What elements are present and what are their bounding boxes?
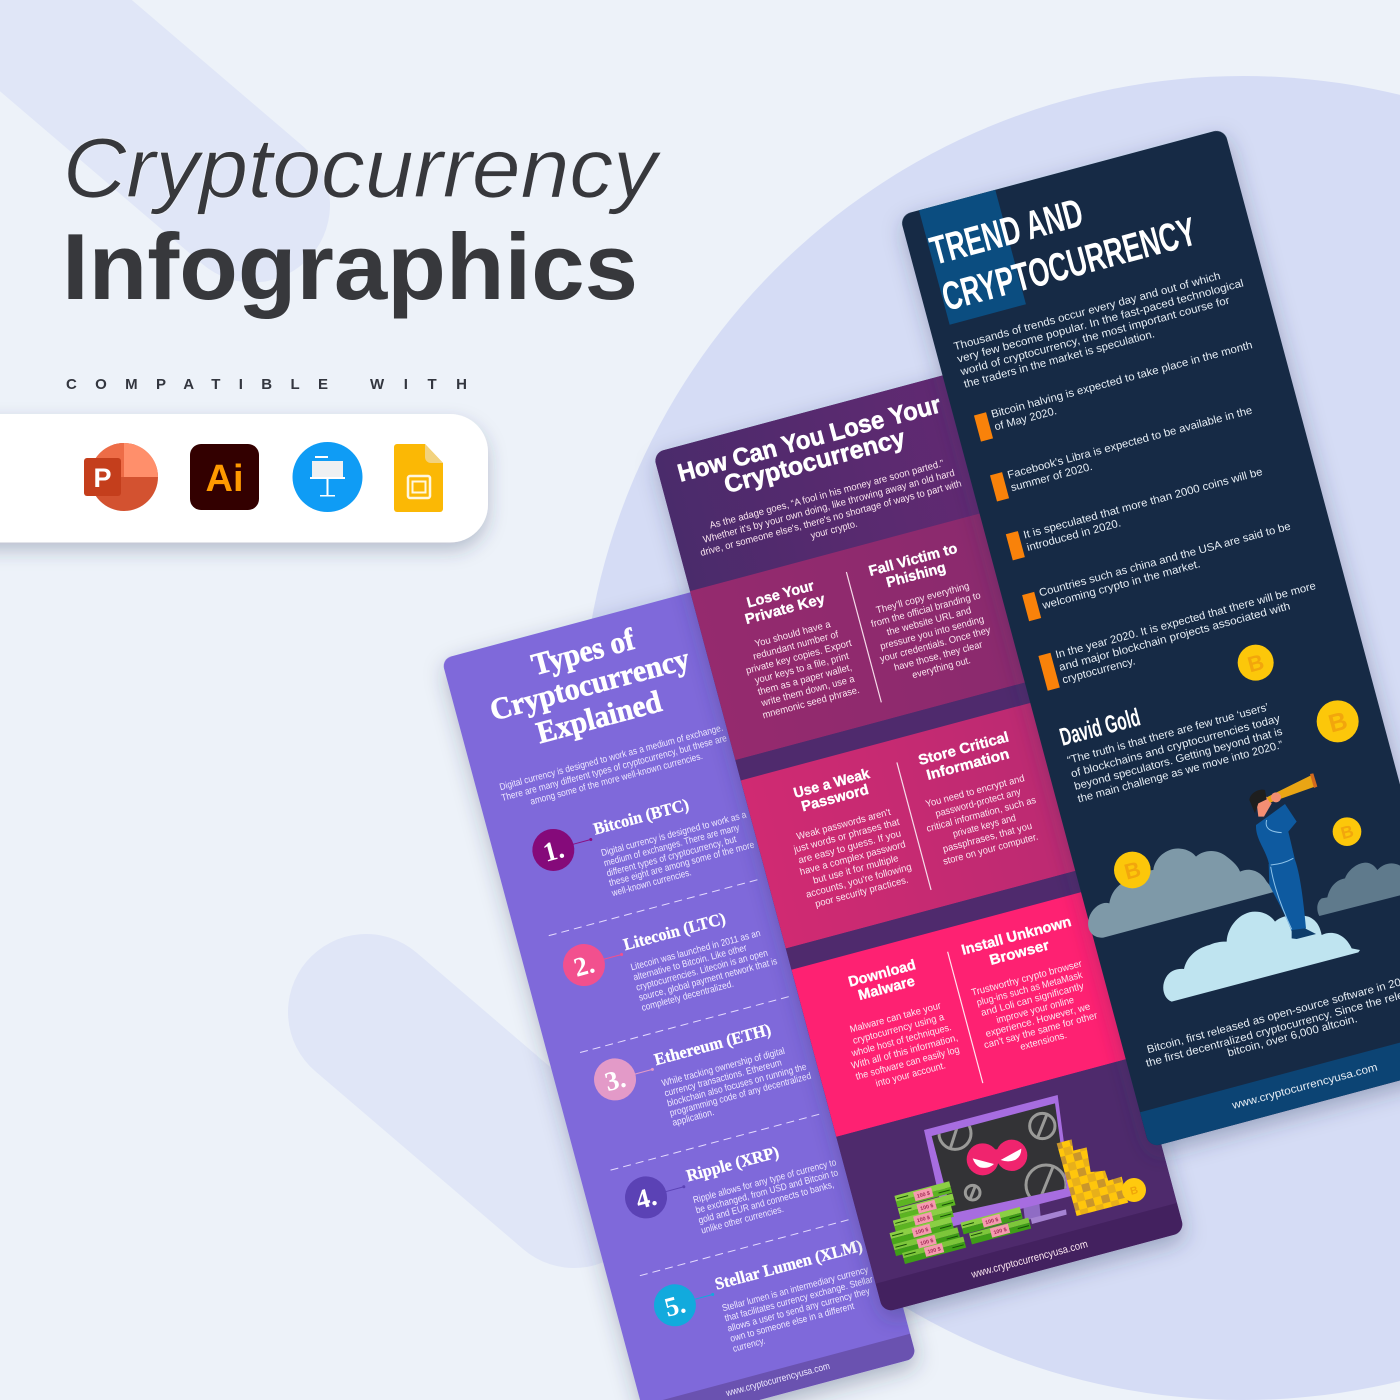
section: Install Unknown Browser: improve your online [995, 995, 1076, 1026]
section: Lose Your Private Key: Private Key [743, 591, 827, 628]
panel: compatible apps [0, 414, 488, 542]
coin [1114, 852, 1151, 888]
item 2: Litecoin: source, global payment network that is [638, 956, 779, 1004]
footer url: www.cryptocurrencyusa.com [724, 1361, 831, 1399]
section: Fall Victim to Phishing: have those, they clear [893, 639, 984, 674]
section: Store Critical Information: passphrases, that you [942, 821, 1033, 855]
heading [925, 164, 1201, 320]
cash stacks: 100 $ [993, 1227, 1008, 1236]
quote [1066, 699, 1289, 805]
cloud: light [1163, 912, 1360, 1002]
section: Store Critical Information: critical information, such as [925, 795, 1037, 835]
intro text [693, 455, 966, 570]
cash stacks: 100 $ [916, 1191, 931, 1200]
cash stacks: 100 $ [927, 1246, 942, 1256]
intro text: There are many different types of cryptocurrency, but these are [500, 733, 728, 804]
item 5: Stellar Lumen: 5. [661, 1288, 689, 1323]
section: Fall Victim to Phishing: They'll copy everything [875, 581, 971, 616]
quote: the main challenge as we move into 2020.” [1076, 739, 1285, 805]
item 4: Ripple: 4. [632, 1181, 660, 1215]
item 3: Ethereum: While tracking ownership of digital [661, 1046, 786, 1089]
icon: Keynote [292, 442, 362, 512]
bullet 2: summer of 2020. [1010, 461, 1094, 494]
cloud: right [1317, 863, 1400, 916]
item 5: Stellar Lumen [649, 1234, 883, 1372]
section: Store Critical Information [907, 727, 1047, 870]
section: Install Unknown Browser: plug-ins such as MetaMask [976, 970, 1084, 1009]
bullet 4 [1021, 521, 1297, 621]
intro text: your crypto. [810, 519, 859, 542]
section: Lose Your Private Key [727, 573, 865, 723]
icon: Google Slides [394, 444, 443, 512]
item 4: Ripple [620, 1127, 846, 1254]
intro text: world of cryptocurrency, the most important course for [958, 295, 1231, 378]
section: Fall Victim to Phishing: the website URL and [886, 605, 973, 638]
panel: How Can You Lose Your Cryptocurrency [653, 372, 1185, 1313]
bullet 3: introduced in 2020. [1026, 517, 1122, 554]
background shape: large circle [581, 76, 1400, 1400]
section: Install Unknown Browser: Browser [988, 937, 1051, 969]
illustration: man with telescope, clouds and coins [1088, 645, 1400, 1002]
section: Use a Weak Password: Password [800, 782, 871, 815]
closing text: bitcoin, over 6,000 altcoin. [1226, 1013, 1359, 1059]
background shape: lower diagonal band [366, 1012, 574, 1190]
footer url: www.cryptocurrencyusa.com [1230, 1061, 1379, 1112]
item 5: Stellar Lumen: allows a user to send any currency they [726, 1286, 871, 1335]
section: Fall Victim to Phishing: pressure you into sending [879, 614, 985, 653]
quote author: David Gold [1057, 703, 1143, 752]
icon: PowerPoint: P [93, 463, 112, 493]
item 3: Ethereum: blockchain also focuses on running the [666, 1062, 808, 1110]
item 2: Litecoin: cryptocurrencies. Litecoin is an open [635, 948, 769, 994]
title [62, 121, 662, 319]
intro text: Thousands of trends occur every day and out of which [953, 270, 1222, 353]
heading: CRYPTOCURRENCY [937, 210, 1201, 320]
item 1: Bitcoin: well-known currencies. [610, 867, 693, 899]
item 3: Ethereum: currency transactions. Ethereum [663, 1057, 783, 1099]
section: Download Malware: whole host of techniques. [850, 1022, 953, 1060]
heading [477, 609, 702, 760]
title line: Infographics: Infographics [62, 214, 638, 319]
item 4: Ripple: unlike other currencies. [700, 1204, 785, 1237]
section: Fall Victim to Phishing: from the official branding to [870, 590, 982, 630]
item 2: Litecoin: 2. [570, 948, 598, 983]
coin: B [1122, 856, 1143, 885]
bullet 1: Bitcoin halving is expected to take place in the month [990, 339, 1254, 421]
section: Install Unknown Browser: Install Unknown [960, 914, 1073, 959]
section: Store Critical Information: You need to encrypt and [924, 773, 1026, 810]
intro text: among some of the more well-known currencies. [529, 751, 704, 808]
item 1: Bitcoin: 1. [540, 833, 567, 868]
gold coin stack: B [1129, 1184, 1140, 1198]
section: Fall Victim to Phishing: your credentials. Once they [879, 625, 992, 665]
gold coin stack [1057, 1139, 1146, 1216]
coin [1333, 817, 1361, 846]
item 4: Ripple: Ripple allows for any type of currency to [692, 1157, 838, 1206]
section: Fall Victim to Phishing: everything out. [911, 655, 972, 681]
quote: beyond speculators. Getting beyond that is [1073, 726, 1284, 793]
heading: Cryptocurrency [721, 424, 908, 499]
illustration: hacker monitor, cash and coins [890, 1095, 1146, 1264]
cash stacks: 100 $ [916, 1215, 931, 1224]
section: Download Malware: Malware can take your [849, 1000, 943, 1035]
heading: How Can You Lose Your [675, 390, 944, 488]
item 3: Ethereum: programming code of any decentralized [669, 1071, 812, 1119]
bullet 5: and major blockchain projects associated with [1058, 600, 1292, 674]
footer url: www.cryptocurrencyusa.com [969, 1238, 1089, 1281]
heading: Types of [528, 621, 639, 682]
section: Lose Your Private Key: your keys to a file, print [754, 651, 850, 687]
section: Download Malware: With all of this information, [850, 1033, 959, 1072]
section: Use a Weak Password: but use it for multiple [812, 853, 900, 887]
item 2: Litecoin: completely decentralized. [640, 979, 735, 1014]
section: Lose Your Private Key: write them down, use a [759, 674, 856, 709]
cash stacks: 100 $ [920, 1238, 934, 1247]
cash stacks: 100 $ [920, 1203, 934, 1212]
item 3: Ethereum: application. [671, 1107, 716, 1129]
monitor [924, 1095, 1071, 1227]
section: Download Malware [828, 952, 965, 1095]
icon: PowerPoint [84, 443, 158, 511]
heading: Explained [532, 683, 665, 750]
coin [1238, 645, 1274, 681]
section: Store Critical Information: private keys and [952, 813, 1017, 840]
section: Install Unknown Browser: and Loli can significantly [980, 981, 1085, 1019]
intro text: very few become popular. In the fast-paced technological [956, 277, 1245, 366]
section: Store Critical Information: password-protect any [934, 787, 1022, 820]
section: Install Unknown Browser: can't say the same for other [983, 1010, 1099, 1051]
section: Download Malware: Download [847, 957, 918, 991]
cash stacks: 100 $ [985, 1217, 999, 1226]
section: Use a Weak Password: Use a Weak [792, 766, 872, 802]
bullet 4: Countries such as china and the USA are said to be [1038, 521, 1292, 599]
bullet 1: of May 2020. [993, 405, 1058, 433]
item 5: Stellar Lumen: currency. [732, 1336, 766, 1355]
background shape: top-left diagonal band [0, 0, 252, 205]
section: Lose Your Private Key: You should have a [754, 619, 832, 650]
item 4: Ripple: be exchanged, from USD and Bitcoin to [695, 1168, 839, 1216]
section: Lose Your Private Key: private key copies. Export [745, 638, 853, 677]
bullet 5: In the year 2020. It is expected that there will be more [1054, 580, 1317, 661]
section: Lose Your Private Key: them as a paper wallet, [757, 662, 853, 698]
section: Download Malware: the software can easily log [855, 1044, 961, 1083]
item 5: Stellar Lumen: Stellar Lumen (XLM) [713, 1236, 864, 1294]
item 1: Bitcoin: medium of exchanges. There are many [603, 822, 741, 869]
title line: Cryptocurrency: Cryptocurrency [63, 121, 662, 215]
panel: Types of Cryptocurrency Explained [442, 587, 917, 1400]
item 2: Litecoin: Litecoin (LTC) [621, 909, 728, 954]
coin: B [1245, 649, 1267, 677]
heading: TREND AND [926, 191, 1088, 274]
item 1: Bitcoin: Bitcoin (BTC) [591, 795, 691, 839]
section: Use a Weak Password: just words or phrases that [792, 817, 901, 856]
panel: Trend and Cryptocurrency [899, 125, 1400, 1151]
item 2: Litecoin: alternative to Bitcoin. Like other [632, 942, 749, 983]
cash stacks: 100 $ [915, 1227, 929, 1236]
coin: B [1338, 821, 1356, 843]
item 5: Stellar Lumen: that facilitates currency exchange. Stellar [724, 1274, 875, 1324]
section: Use a Weak Password [777, 762, 916, 912]
item 4: Ripple: gold and EUR and connects to banks, [697, 1180, 835, 1226]
intro text: drive, or someone else's, there's no shortage of ways to part with [699, 478, 963, 559]
icon: Illustrator: Ai [206, 458, 244, 500]
section: Lose Your Private Key: redundant number of [752, 629, 840, 663]
footer band [642, 1334, 917, 1400]
item 1: Bitcoin: Digital currency is designed to work as a [600, 809, 748, 859]
section: Fall Victim to Phishing: Phishing [885, 560, 948, 591]
section: Use a Weak Password: are easy to guess. If you [797, 828, 902, 866]
section: Lose Your Private Key: mnemonic seed phrase. [761, 685, 861, 721]
section: Store Critical Information: Store Critical [917, 729, 1011, 769]
section: Store Critical Information: Information [925, 746, 1011, 784]
item 3: Ethereum: Ethereum (ETH) [652, 1020, 773, 1069]
bullet 3: It is speculated that more than 2000 coins will be [1022, 466, 1264, 541]
section: Lose Your Private Key: Lose Your [745, 578, 816, 611]
bullet 5: cryptocurrency. [1061, 655, 1137, 686]
section: Install Unknown Browser [957, 914, 1102, 1062]
intro text: Whether it's by your own doing, like throwing away an old hard [702, 468, 956, 546]
intro text: the traders in the market is speculation. [963, 328, 1156, 391]
bullet 3 [1006, 466, 1268, 560]
section: Fall Victim to Phishing [856, 538, 998, 688]
section: Install Unknown Browser: experience. However, we [984, 1001, 1092, 1040]
cloud: grey [1088, 849, 1275, 938]
item 2: Litecoin: Litecoin was launched in 2011 as an [630, 928, 762, 973]
section: Store Critical Information: store on your computer. [942, 832, 1039, 868]
person [1249, 773, 1317, 939]
mask [967, 1140, 1027, 1175]
section: Install Unknown Browser: extensions. [1019, 1030, 1068, 1053]
quote: “The truth is that there are few true ‘users’ [1066, 701, 1270, 767]
bullet 2: Facebook's Libra is expected to be available in the [1006, 405, 1254, 482]
bands [919, 190, 1400, 1146]
icon: Illustrator [190, 444, 259, 510]
section backgrounds [653, 372, 1185, 1313]
compatible with label: COMPATIBLE [66, 376, 328, 393]
bullet 2 [990, 405, 1258, 501]
section: Use a Weak Password: poor security practices. [814, 875, 910, 910]
section: Use a Weak Password: accounts, you're following [805, 862, 913, 901]
section: Use a Weak Password: Weak passwords aren't [795, 807, 892, 843]
item 1: Bitcoin: different types of cryptocurrency, but [605, 834, 738, 879]
bullet 5 [1038, 580, 1324, 691]
section: Install Unknown Browser: Trustworthy crypto browser [970, 958, 1084, 999]
item 5: Stellar Lumen: own to someone else in a different [729, 1301, 856, 1345]
item 3: Ethereum: 3. [601, 1063, 629, 1097]
section: Fall Victim to Phishing: Fall Victim to [867, 541, 959, 580]
compatible with label [66, 376, 467, 393]
section: Download Malware: into your account. [875, 1060, 947, 1090]
item 1: Bitcoin: these eight are among some of the more [608, 840, 756, 889]
item 4: Ripple: Ripple (XRP) [684, 1142, 781, 1185]
item 1: Bitcoin [528, 779, 759, 916]
intro text: As the adage goes, “A fool in his money are soon parted.” [708, 458, 945, 532]
item 5: Stellar Lumen: Stellar lumen is an intermediary currency [721, 1265, 870, 1314]
item 2: Litecoin [558, 896, 782, 1031]
bullet 4: welcoming crypto in the market. [1040, 558, 1202, 612]
section: Download Malware: cryptocurrency using a [852, 1012, 946, 1047]
section: Use a Weak Password: have a complex password [799, 839, 907, 878]
cash stacks [890, 1181, 1031, 1264]
bullet 1 [973, 339, 1258, 442]
section: Download Malware: Malware [857, 974, 917, 1004]
intro text: Digital currency is designed to work as a medium of exchange. [498, 723, 724, 793]
coin [1317, 700, 1359, 742]
coin: B [1326, 707, 1350, 739]
intro text [952, 265, 1252, 391]
heading: Cryptocurrency [486, 640, 694, 727]
compatible with label: WITH [370, 376, 467, 393]
quote: of blockchains and cryptocurrencies today [1070, 713, 1282, 780]
item 3: Ethereum [589, 1010, 815, 1146]
